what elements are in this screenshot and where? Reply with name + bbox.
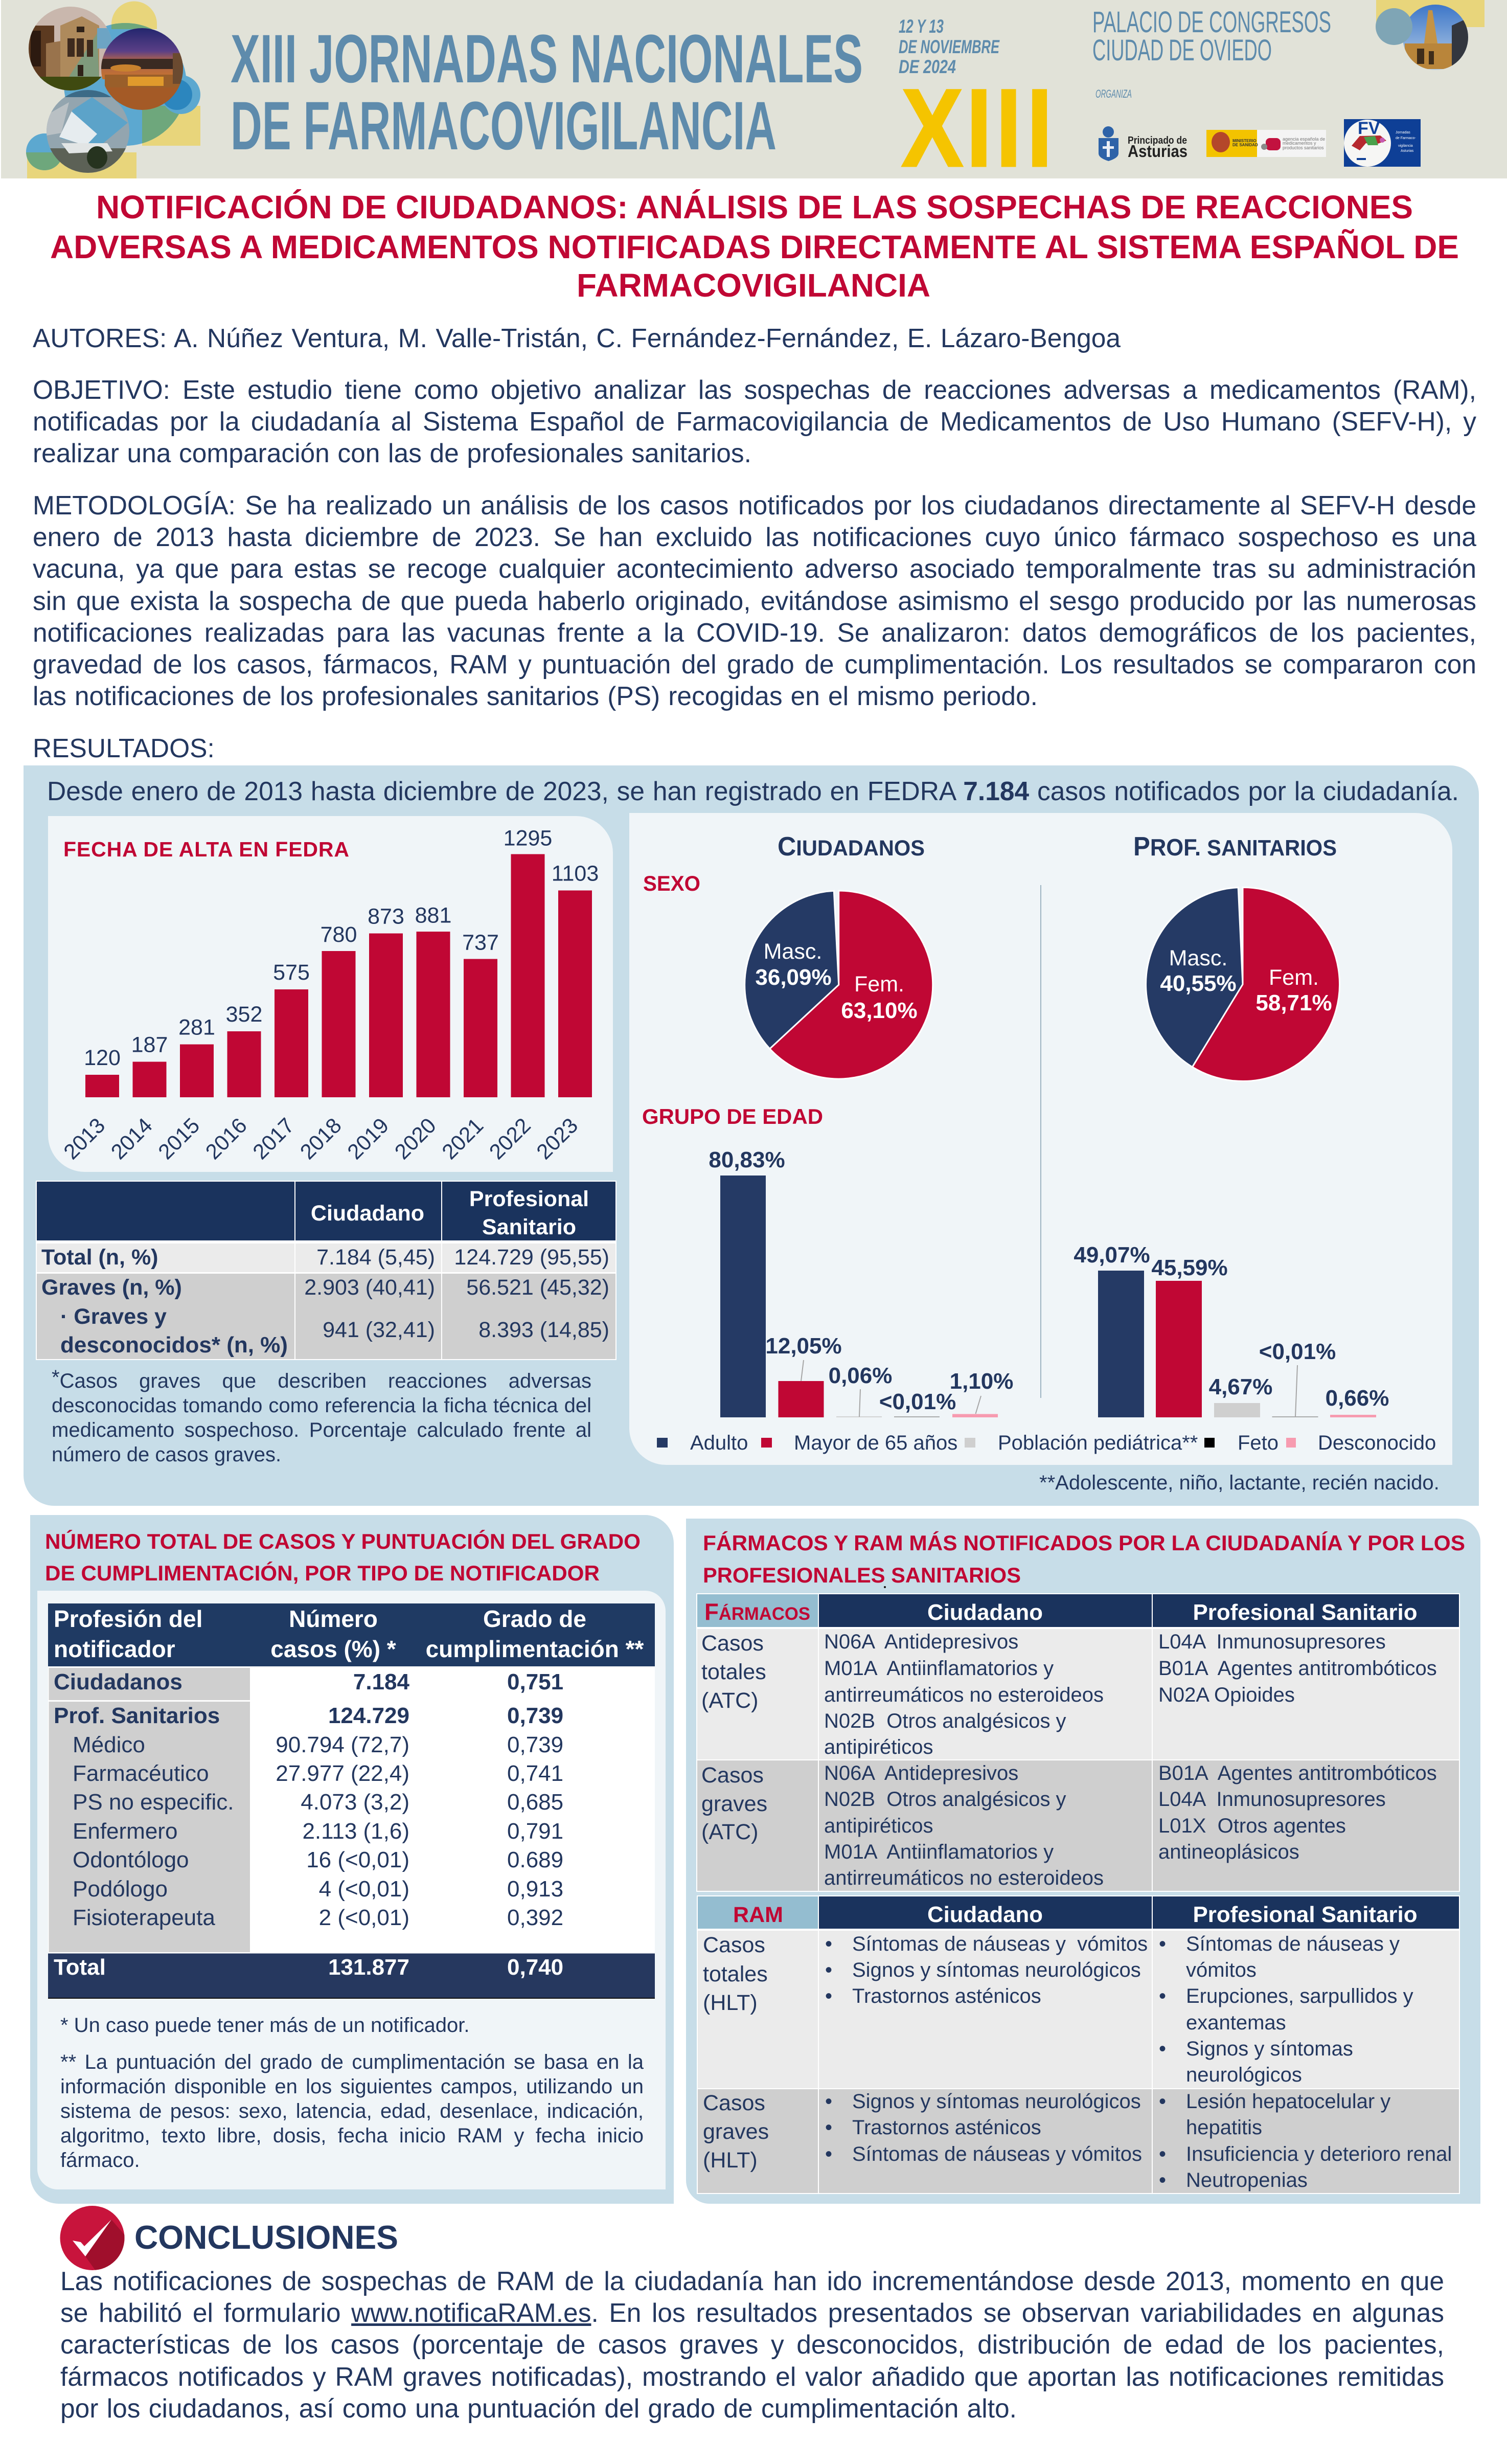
logo: Ministerio de Sanidad and AEMPS	[1206, 130, 1326, 157]
table footnote: número de casos graves.	[52, 1443, 281, 1466]
age footnote: **Adolescente, niño, lactante, recién nacido.	[1039, 1472, 1440, 1494]
table header: casos (%) *	[270, 1636, 396, 1662]
dates: DE NOVIEMBRE	[899, 36, 1000, 57]
age bars: profesionales	[1098, 1271, 1376, 1417]
age values: profesionales: 0,66%	[1326, 1386, 1389, 1411]
table header	[733, 1902, 1417, 1927]
bar values: 873	[368, 904, 404, 929]
conclusions text: fármacos notificados y RAM graves notificadas), mostrando el valor añadido que aportan las notificaciones remitidas	[60, 2362, 1444, 2391]
logo: Ministerio de Sanidad and AEMPS: MINISTERIO	[1232, 139, 1257, 143]
venue: CIUDAD DE OVIEDO	[1092, 34, 1272, 67]
table header: Ciudadano	[927, 1902, 1043, 1927]
cell: profesional totales: N02A Opioides	[1158, 1684, 1295, 1706]
row: casos graves HLT: graves	[703, 2119, 769, 2144]
table header: Profesional Sanitario	[1193, 1600, 1417, 1625]
row: prof. sanitarios	[54, 1703, 563, 1728]
cell: ciudadano graves: N06A Antidepresivos	[824, 1762, 1018, 1784]
inner light panel	[37, 1591, 666, 2189]
rows: professions: Fisioterapeuta	[73, 1905, 215, 1930]
pie: sexo profesionales	[1146, 888, 1340, 1081]
title: ADVERSAS A MEDICAMENTOS NOTIFICADAS DIRECTAMENTE AL SISTEMA ESPAÑOL DE	[50, 229, 1459, 265]
conference name: XIII JORNADAS NACIONALES	[231, 21, 863, 97]
legend: Desconocido	[1318, 1432, 1436, 1454]
row: graves y desconocidos: · Graves y	[60, 1304, 167, 1329]
panel heading: NÚMERO TOTAL DE CASOS Y PUNTUACIÓN DEL GRADO	[45, 1529, 641, 1553]
logo: Principado de Asturias: Asturias	[1128, 142, 1188, 161]
pie labels: ciudadanos: 36,09%	[755, 965, 832, 990]
objective: OBJETIVO: Este estudio tiene como objetivo analizar las sospechas de reacciones adversas a medicamentos (RAM),	[33, 375, 1476, 404]
age bars: ciudadanos	[720, 1176, 998, 1417]
cell: ciudadano totales	[824, 1631, 1104, 1758]
cell: ciudadano totales: antipiréticos	[824, 1736, 933, 1758]
cell: profesional graves: L01X Otros agentes	[1158, 1815, 1346, 1837]
pie labels: profesionales: 58,71%	[1255, 990, 1332, 1015]
rows: professions: 0,392	[507, 1905, 563, 1930]
row: casos totales ATC: (ATC)	[701, 1688, 758, 1713]
row: total	[41, 1245, 609, 1270]
logo: Ministerio de Sanidad and AEMPS: agencia española de	[1283, 137, 1325, 142]
year axis: 2021	[437, 1113, 488, 1164]
cell: profesional totales: •	[1159, 2038, 1166, 2060]
table header: Ciudadano	[311, 1201, 424, 1226]
cell: profesional graves	[1158, 1762, 1437, 1863]
cell: ciudadano totales: antirreumáticos no esteroideos	[824, 1684, 1104, 1706]
table header: Número	[289, 1606, 378, 1632]
cell: profesional graves: •	[1159, 2143, 1166, 2165]
objective: realizar una comparación con las de profesionales sanitarios.	[33, 438, 751, 468]
cell: profesional totales: exantemas	[1186, 2011, 1286, 2034]
year axis: 2013	[59, 1113, 109, 1164]
cell: ciudadano totales: •	[825, 1959, 832, 1981]
row: total: 131.877	[328, 1955, 409, 1980]
row: total: 0,740	[507, 1955, 563, 1980]
row: casos graves ATC: graves	[701, 1792, 767, 1816]
cell: ciudadano totales: N02B Otros analgésicos y	[824, 1710, 1066, 1732]
pie labels: ciudadanos	[755, 939, 918, 1023]
title	[50, 189, 1459, 304]
heading: profesionales sanitarios: PROF. SANITARIOS	[1133, 832, 1337, 862]
edition number: XIII	[901, 66, 1053, 190]
cell: ciudadano graves: •	[825, 2143, 832, 2165]
cell: profesional totales: Signos y síntomas	[1186, 2038, 1353, 2060]
rows: professions: PS no especific.	[73, 1790, 234, 1815]
cell: ciudadano graves: •	[825, 2090, 832, 2113]
table: fármacos	[696, 1593, 1460, 1892]
rows: professions: 90.794 (72,7)	[276, 1732, 409, 1757]
cell: ciudadano graves: Síntomas de náuseas y vómitos	[852, 2143, 1142, 2165]
logo: FV: FV	[1358, 119, 1380, 138]
rows: professions: 16 (<0,01)	[306, 1847, 409, 1872]
bar values: 737	[462, 931, 499, 955]
cell: ciudadano totales: Síntomas de náuseas y vómitos	[852, 1933, 1148, 1955]
row: casos totales ATC	[701, 1631, 766, 1713]
cell: profesional totales: B01A Agentes antitrombóticos	[1158, 1657, 1437, 1680]
legend	[657, 1432, 1436, 1454]
row: prof. sanitarios: 0,739	[507, 1703, 563, 1728]
cell: profesional totales: neurológicos	[1186, 2064, 1302, 2086]
cell: ciudadano totales: Trastornos asténicos	[852, 1985, 1041, 2007]
bar values	[84, 826, 599, 1070]
rows: professions: Farmacéutico	[73, 1761, 209, 1786]
panel heading: DE CUMPLIMENTACIÓN, POR TIPO DE NOTIFICADOR	[45, 1561, 600, 1585]
cell: ciudadano totales: Signos y síntomas neurológicos	[852, 1959, 1141, 1981]
cell: ciudadano totales: •	[825, 1985, 832, 2007]
table footnote: *Casos graves que describen reacciones adversas	[52, 1366, 591, 1392]
bar values: 881	[415, 903, 451, 928]
rows: professions: 0,913	[507, 1877, 563, 1902]
conclusions text: se habilitó el formulario www.notificaRAM.es. En los resultados presentados se observan variabilidades en algunas	[60, 2298, 1444, 2327]
cell: profesional graves: •	[1159, 2090, 1166, 2113]
bar values: 352	[226, 1002, 262, 1027]
icon: conclusions check mark	[60, 2206, 125, 2270]
conclusions text: Las notificaciones de sospechas de RAM de la ciudadanía han ido incrementándose desde 2013, momento en que	[60, 2266, 1444, 2296]
bar values: 281	[178, 1015, 215, 1040]
row: casos totales HLT	[703, 1933, 768, 2015]
cell: profesional totales: L04A Inmunosupresores	[1158, 1631, 1386, 1653]
title: NOTIFICACIÓN DE CIUDADANOS: ANÁLISIS DE LAS SOSPECHAS DE REACCIONES	[96, 189, 1413, 225]
age values: profesionales	[1074, 1242, 1389, 1411]
rows: professions: 27.977 (22,4)	[276, 1761, 409, 1786]
rows: professions: 2 (<0,01)	[319, 1905, 409, 1930]
venue: PALACIO DE CONGRESOS	[1092, 6, 1331, 39]
age values: profesionales: 45,59%	[1151, 1255, 1228, 1280]
methodology: gravedad de los casos, fármacos, RAM y puntuación del grado de cumplimentación. Los resultados se compararon con	[33, 649, 1476, 679]
row: casos graves ATC	[701, 1763, 767, 1844]
table header	[704, 1598, 1417, 1625]
year axis: 2022	[485, 1113, 535, 1164]
legend: Mayor de 65 años	[794, 1432, 957, 1454]
objective: notificadas por la ciudadanía al Sistema Español de Farmacovigilancia de Medicamentos de Uso Humano (SEFV-H), y	[33, 406, 1476, 436]
logo: Ministerio de Sanidad and AEMPS: DE SANIDAD	[1232, 143, 1258, 147]
pie: sexo ciudadanos	[745, 891, 933, 1079]
chart heading: FECHA DE ALTA EN FEDRA	[63, 838, 349, 861]
row: total	[54, 1955, 563, 1980]
dates: 12 Y 13	[899, 16, 944, 37]
pie labels: profesionales: 40,55%	[1160, 971, 1237, 996]
panel: casos y grado de cumplimentación	[30, 1515, 674, 2204]
pie labels: ciudadanos: Fem.	[854, 972, 904, 997]
footnote: grado de cumplimentación: fármaco.	[60, 2149, 140, 2172]
table header: Sanitario	[482, 1215, 576, 1239]
cell: ciudadano graves	[824, 1762, 1104, 1889]
footnote: grado de cumplimentación: algoritmo, texto libre, dosis, fecha inicio RAM y fecha inicio	[60, 2124, 644, 2147]
logo: FV: vigilancia	[1398, 144, 1413, 148]
row: graves: 2.903 (40,41)	[304, 1275, 435, 1300]
dates	[899, 16, 1000, 77]
cell: profesional totales	[1158, 1631, 1437, 1706]
rows: professions: 0,741	[507, 1761, 563, 1786]
methodology: vacuna, ya que para estas se recoge cualquier acontecimiento adverso asociado temporalmente tras su administración	[33, 554, 1476, 583]
results heading: RESULTADOS:	[33, 733, 215, 763]
bar values: 187	[131, 1033, 168, 1057]
age values: ciudadanos	[709, 1147, 1013, 1414]
rows: professions: 0.689	[507, 1847, 563, 1872]
row: graves y desconocidos: 8.393 (14,85)	[478, 1318, 609, 1342]
age values: ciudadanos: <0,01%	[879, 1389, 956, 1414]
year axis: 2014	[106, 1113, 157, 1164]
methodology: notificaciones realizadas para las vacunas frente a la COVID-19. Se analizaron: datos demográficos de los pacientes,	[33, 618, 1476, 647]
rows: professions: Odontólogo	[73, 1847, 189, 1872]
methodology: las notificaciones de los profesionales sanitarios (PS) recogidas en el mismo periodo.	[33, 681, 1038, 711]
table header: Profesión del	[54, 1606, 202, 1632]
methodology: enero de 2013 hasta diciembre de 2023. Se han excluido las notificaciones cuyo único fármaco sospechoso es una	[33, 522, 1476, 552]
age values: profesionales: <0,01%	[1259, 1339, 1336, 1364]
row: graves y desconocidos: desconocidos* (n, %)	[60, 1332, 288, 1358]
cell: profesional totales: vómitos	[1186, 1959, 1257, 1981]
cell: ciudadano graves	[825, 2090, 1142, 2165]
row: graves: Graves (n, %)	[41, 1275, 182, 1300]
row: total: Total	[54, 1955, 106, 1980]
conference name: DE FARMACOVIGILANCIA	[231, 88, 777, 164]
legend: Adulto	[690, 1432, 748, 1454]
year axis	[59, 1113, 582, 1164]
row: ciudadanos: 0,751	[507, 1669, 563, 1694]
panel: bar chart background	[48, 816, 613, 1172]
year axis: 2020	[390, 1113, 441, 1164]
age values: profesionales: 49,07%	[1074, 1242, 1150, 1268]
heading: ciudadanos: CIUDADANOS	[778, 832, 925, 862]
bar values: 575	[273, 960, 310, 985]
row: prof. sanitarios: Prof. Sanitarios	[54, 1703, 220, 1728]
footnote: notificador: * Un caso puede tener más de un notificador.	[60, 2014, 470, 2037]
table footnote	[52, 1366, 591, 1466]
row: casos totales HLT: totales	[703, 1962, 768, 1986]
pie labels: profesionales: Fem.	[1269, 965, 1319, 990]
title: FARMACOVIGILANCIA	[577, 267, 930, 304]
organiser label: ORGANIZA	[1095, 87, 1132, 100]
panel: fármacos y RAM	[686, 1519, 1480, 2204]
cell: ciudadano totales: •	[825, 1933, 832, 1955]
conference name	[231, 21, 863, 164]
table: profesión del notificador	[48, 1603, 655, 1999]
cell: profesional totales: Erupciones, sarpullidos y	[1186, 1985, 1413, 2007]
bar values: 120	[84, 1046, 121, 1070]
cell: ciudadano graves: Signos y síntomas neurológicos	[852, 2090, 1141, 2113]
legend: Feto	[1238, 1432, 1278, 1454]
table footnote: medicamento sospechoso. Porcentaje calculado frente al	[52, 1419, 591, 1441]
logo: FV: Asturias	[1401, 149, 1414, 153]
conclusions text: características de los casos (porcentaje de casos graves y desconocidos, distribución de edad de los pacientes,	[60, 2330, 1444, 2359]
rows: professions: 0,791	[507, 1819, 563, 1844]
cell: ciudadano graves: •	[825, 2116, 832, 2139]
cell: ciudadano graves: antirreumáticos no esteroideos	[824, 1867, 1104, 1889]
cell: profesional graves: Lesión hepatocelular y	[1186, 2090, 1390, 2113]
row: casos graves HLT: Casos	[703, 2091, 765, 2115]
logo: FV: de Farmaco-	[1396, 137, 1416, 140]
row: graves y desconocidos: 941 (32,41)	[323, 1318, 435, 1342]
methodology	[33, 490, 1476, 711]
cell: ciudadano graves: antipiréticos	[824, 1815, 933, 1837]
panel heading: FÁRMACOS Y RAM MÁS NOTIFICADOS POR LA CIUDADANÍA Y POR LOS	[703, 1531, 1465, 1555]
logo: Principado de Asturias	[1099, 126, 1188, 161]
row: graves y desconocidos	[60, 1304, 609, 1358]
objective	[33, 375, 1476, 468]
cell: profesional graves: L04A Inmunosupresores	[1158, 1788, 1386, 1811]
age values: ciudadanos: 12,05%	[765, 1333, 842, 1359]
bar chart: fecha de alta en FEDRA	[59, 826, 599, 1164]
logo: Ministerio de Sanidad and AEMPS: medicamentos y	[1283, 141, 1316, 146]
rows: professions: Enfermero	[73, 1819, 177, 1844]
table header: notificador	[54, 1636, 175, 1662]
footnote: grado de cumplimentación: ** La puntuación del grado de cumplimentación se basa en la	[60, 2051, 644, 2073]
cell: profesional graves: •	[1159, 2169, 1166, 2191]
year axis: 2015	[153, 1113, 204, 1164]
table header: Profesional	[469, 1187, 589, 1211]
table header: Grado de	[483, 1606, 586, 1632]
rows: professions: 4.073 (3,2)	[301, 1790, 409, 1815]
row: prof. sanitarios: 124.729	[328, 1703, 409, 1728]
row: total: 7.184 (5,45)	[316, 1245, 435, 1270]
decorative circles and collage photos	[26, 1, 200, 178]
table header: RAM	[733, 1903, 783, 1927]
footnote: grado de cumplimentación: información disponible en los siguientes campos, utilizando un	[60, 2075, 644, 2098]
year axis: 2017	[248, 1113, 299, 1164]
year axis: 2023	[532, 1113, 582, 1164]
table header	[54, 1606, 644, 1662]
row: casos totales HLT: (HLT)	[703, 1991, 758, 2015]
cell: profesional graves: hepatitis	[1186, 2116, 1262, 2139]
conclusions heading: CONCLUSIONES	[134, 2219, 398, 2256]
cell: profesional graves: antineoplásicos	[1158, 1841, 1299, 1863]
conclusions text	[60, 2265, 1444, 2424]
panel heading: PROFESIONALES SANITARIOS	[703, 1563, 1021, 1587]
table header: Ciudadano	[927, 1600, 1043, 1625]
cell: profesional totales: •	[1159, 1985, 1166, 2007]
conclusions text: por los ciudadanos, así como una puntuación del grado de cumplimentación alto.	[60, 2393, 1017, 2423]
rows: professions: 0,739	[507, 1732, 563, 1757]
logo: FV: Jornadas	[1396, 131, 1410, 134]
rows: professions: Podólogo	[73, 1877, 168, 1902]
panel: demographics background	[629, 813, 1452, 1465]
age values: ciudadanos: 1,10%	[950, 1369, 1013, 1394]
methodology: METODOLOGÍA: Se ha realizado un análisis de los casos notificados por los ciudadanos directamente al SEFV-H desde	[33, 490, 1476, 520]
cell: profesional totales	[1159, 1933, 1413, 2086]
logo: Ministerio de Sanidad and AEMPS: productos sanitarios	[1283, 145, 1324, 150]
pie labels: profesionales	[1160, 946, 1332, 1015]
panel heading	[45, 1530, 642, 1587]
rows: professions	[73, 1732, 563, 1930]
rows: professions: 0,685	[507, 1790, 563, 1815]
cell: ciudadano graves: N02B Otros analgésicos y	[824, 1788, 1066, 1811]
cell: ciudadano graves: M01A Antiinflamatorios y	[824, 1841, 1054, 1863]
results summary sentence: Desde enero de 2013 hasta diciembre de 2023, se han registrado en FEDRA 7.184 casos notificados por la ciudadanía.	[47, 776, 1459, 806]
year axis: 2016	[201, 1113, 252, 1164]
table: casos totales y graves	[36, 1181, 616, 1360]
year axis: 2018	[295, 1113, 346, 1164]
header banner	[1, 0, 1507, 190]
age values: ciudadanos: 0,06%	[829, 1363, 892, 1388]
pie labels: ciudadanos: Masc.	[764, 939, 822, 964]
decoration: cathedral photo	[1376, 0, 1485, 70]
table header	[311, 1187, 589, 1239]
row: casos totales ATC: totales	[701, 1660, 766, 1684]
logo: FV	[1344, 119, 1421, 167]
pie labels: ciudadanos: 63,10%	[841, 998, 918, 1023]
table header: cumplimentación **	[426, 1636, 644, 1662]
legend: Población pediátrica**	[998, 1432, 1198, 1454]
cell: profesional totales: •	[1159, 1933, 1166, 1955]
row: casos totales ATC: Casos	[701, 1631, 764, 1656]
rows: professions: Médico	[73, 1732, 145, 1757]
bar values: 780	[321, 922, 357, 947]
table: RAM	[697, 1895, 1460, 2194]
bar values: 1295	[504, 826, 552, 851]
row: casos graves ATC: Casos	[701, 1763, 764, 1788]
row: total: Total (n, %)	[41, 1245, 158, 1270]
footnote: grado de cumplimentación	[60, 2050, 644, 2173]
cell: profesional totales: Síntomas de náuseas y	[1186, 1933, 1400, 1955]
cell: ciudadano totales: N06A Antidepresivos	[824, 1631, 1018, 1653]
table header: Profesional Sanitario	[1193, 1902, 1417, 1927]
bar values: 1103	[552, 861, 599, 886]
cell: profesional graves: B01A Agentes antitrombóticos	[1158, 1762, 1437, 1784]
logo: Principado de Asturias: Principado de	[1128, 134, 1187, 146]
cell: profesional graves: Insuficiencia y deterioro renal	[1186, 2143, 1452, 2165]
footnote: grado de cumplimentación: sistema de pesos: sexo, latencia, edad, desenlace, indicación,	[60, 2100, 644, 2122]
panel: results	[24, 765, 1479, 1506]
table footnote: desconocidas tomando como referencia la ficha técnica del	[52, 1394, 591, 1417]
rows: professions: 4 (<0,01)	[319, 1877, 409, 1902]
demographic charts	[629, 813, 1452, 1465]
age values: ciudadanos: 80,83%	[709, 1147, 785, 1172]
row: total: 124.729 (95,55)	[454, 1245, 609, 1270]
year axis: 2019	[342, 1113, 393, 1164]
row: graves	[41, 1275, 609, 1300]
cell: ciudadano totales: M01A Antiinflamatorios y	[824, 1657, 1054, 1680]
row: casos graves HLT: (HLT)	[703, 2148, 758, 2173]
age values: profesionales: 4,67%	[1209, 1374, 1272, 1399]
row: ciudadanos	[54, 1669, 563, 1694]
row: graves: 56.521 (45,32)	[466, 1275, 609, 1300]
authors: AUTORES: A. Núñez Ventura, M. Valle-Tristán, C. Fernández-Fernández, E. Lázaro-Bengoa	[33, 323, 1121, 353]
table header: FÁRMACOS	[704, 1598, 810, 1625]
row: casos graves HLT	[703, 2091, 769, 2173]
heading: grupo de edad: GRUPO DE EDAD	[642, 1104, 823, 1128]
cell: profesional graves: Neutropenias	[1186, 2169, 1308, 2191]
methodology: sin que exista la sospecha de que pueda haberlo originado, evitándose asimismo el sesgo producido por las numerosas	[33, 586, 1476, 616]
row: ciudadanos: 7.184	[353, 1669, 410, 1694]
panel heading	[703, 1531, 1465, 1589]
dates: DE 2024	[899, 56, 956, 77]
heading: sexo: SEXO	[643, 871, 700, 895]
bars	[85, 854, 592, 1097]
row: ciudadanos: Ciudadanos	[54, 1669, 182, 1694]
pie labels: profesionales: Masc.	[1169, 946, 1227, 970]
cell: ciudadano totales	[825, 1933, 1148, 2007]
rows: professions: 2.113 (1,6)	[302, 1819, 409, 1844]
cell: ciudadano graves: Trastornos asténicos	[852, 2116, 1041, 2139]
cell: profesional graves	[1159, 2090, 1452, 2191]
row: casos totales HLT: Casos	[703, 1933, 765, 1957]
row: casos graves ATC: (ATC)	[701, 1820, 758, 1844]
venue	[1092, 6, 1331, 67]
